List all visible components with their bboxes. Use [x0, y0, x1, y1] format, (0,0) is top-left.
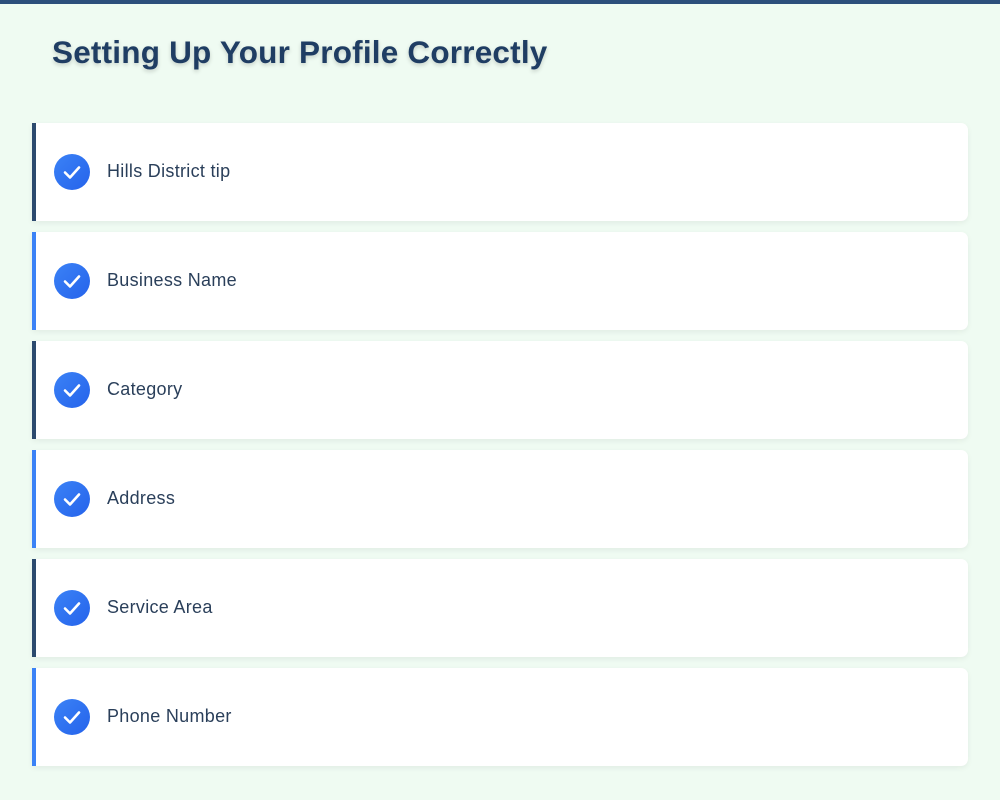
card: Phone Number: Phone Number	[107, 706, 232, 726]
card: Business Name	[32, 232, 968, 330]
card: Service Area	[32, 559, 968, 657]
card: Service Area: Service Area	[107, 597, 213, 617]
card: Address: Address	[107, 488, 175, 508]
card: Address	[32, 450, 968, 548]
card: Category: Category	[107, 379, 182, 399]
card: Category	[32, 341, 968, 439]
card: Hills District tip	[32, 123, 968, 221]
title: Setting Up Your Profile Correctly	[52, 34, 548, 70]
card: Hills District tip: Hills District tip	[107, 161, 230, 181]
card: Phone Number	[32, 668, 968, 766]
card: Business Name: Business Name	[107, 270, 237, 290]
